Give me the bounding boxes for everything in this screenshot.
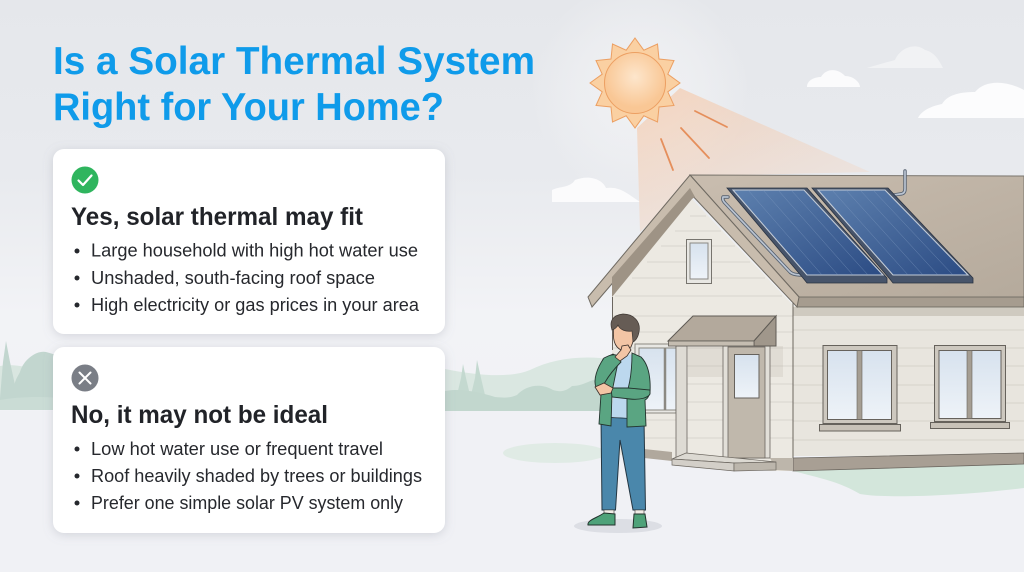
bullet list: Large household with high hot water use bbox=[91, 240, 418, 260]
main roof bbox=[690, 175, 1024, 298]
bullet list: Prefer one simple solar PV system only bbox=[91, 493, 403, 513]
heading: No, it may not be ideal bbox=[71, 401, 328, 429]
raised arm to chin bbox=[595, 355, 621, 387]
title bbox=[53, 40, 535, 129]
right window one bbox=[820, 346, 900, 431]
bullet list: Low hot water use or frequent travel bbox=[91, 439, 383, 459]
panel: yes, solar thermal may fit bbox=[53, 149, 445, 334]
title line one: Is a Solar Thermal System bbox=[53, 40, 535, 83]
gable roof trim bbox=[588, 175, 799, 307]
bullet list: High electricity or gas prices in your area bbox=[91, 295, 420, 315]
bullet list: Roof heavily shaded by trees or buildings bbox=[91, 466, 422, 486]
icon: green check bbox=[72, 166, 98, 194]
front window behind person bbox=[635, 344, 676, 413]
person thinking bbox=[574, 314, 662, 533]
shirt bbox=[611, 354, 633, 418]
clouds bbox=[552, 46, 1024, 202]
head bbox=[613, 322, 634, 350]
forearm across body bbox=[611, 388, 650, 399]
hair bbox=[611, 314, 639, 342]
background landscape: left hills and trees bbox=[0, 341, 60, 410]
hand on chin bbox=[615, 345, 631, 361]
bullet list bbox=[74, 439, 422, 513]
pipes highlight bbox=[723, 171, 905, 275]
roof fascia bbox=[797, 297, 1024, 307]
porch step bbox=[672, 453, 776, 471]
right window two bbox=[930, 346, 1010, 428]
trousers bbox=[601, 417, 646, 510]
gable front wall bbox=[612, 197, 793, 471]
house bbox=[588, 175, 1024, 471]
icon: sun bbox=[590, 38, 680, 128]
icon: grey cross bbox=[72, 364, 98, 392]
solar thermal collector pipes bbox=[723, 171, 905, 275]
background landscape: right hills and trees bbox=[445, 358, 612, 411]
ground patches bbox=[503, 443, 1024, 496]
porch awning bbox=[668, 316, 776, 346]
right wing wall bbox=[793, 306, 1024, 471]
gable window bbox=[686, 240, 712, 284]
shoes bbox=[588, 513, 647, 528]
sun rays bbox=[661, 111, 727, 170]
ground shadow bbox=[574, 519, 662, 533]
title line two: Right for Your Home? bbox=[53, 86, 444, 129]
heading: Yes, solar thermal may fit bbox=[71, 203, 364, 231]
solar panel one bbox=[727, 188, 887, 283]
jacket right panel bbox=[627, 353, 650, 427]
light beam from sun to roof bbox=[637, 88, 870, 232]
solar panel two bbox=[812, 188, 973, 283]
bullet list: Unshaded, south-facing roof space bbox=[91, 268, 375, 288]
entry door bbox=[723, 346, 770, 458]
ankles bbox=[604, 510, 644, 514]
hand on arm bbox=[595, 383, 613, 395]
porch post bbox=[676, 346, 687, 459]
panel: no, it may not be ideal bbox=[53, 347, 445, 533]
jacket left panel bbox=[599, 354, 619, 426]
bullet list bbox=[74, 240, 420, 315]
